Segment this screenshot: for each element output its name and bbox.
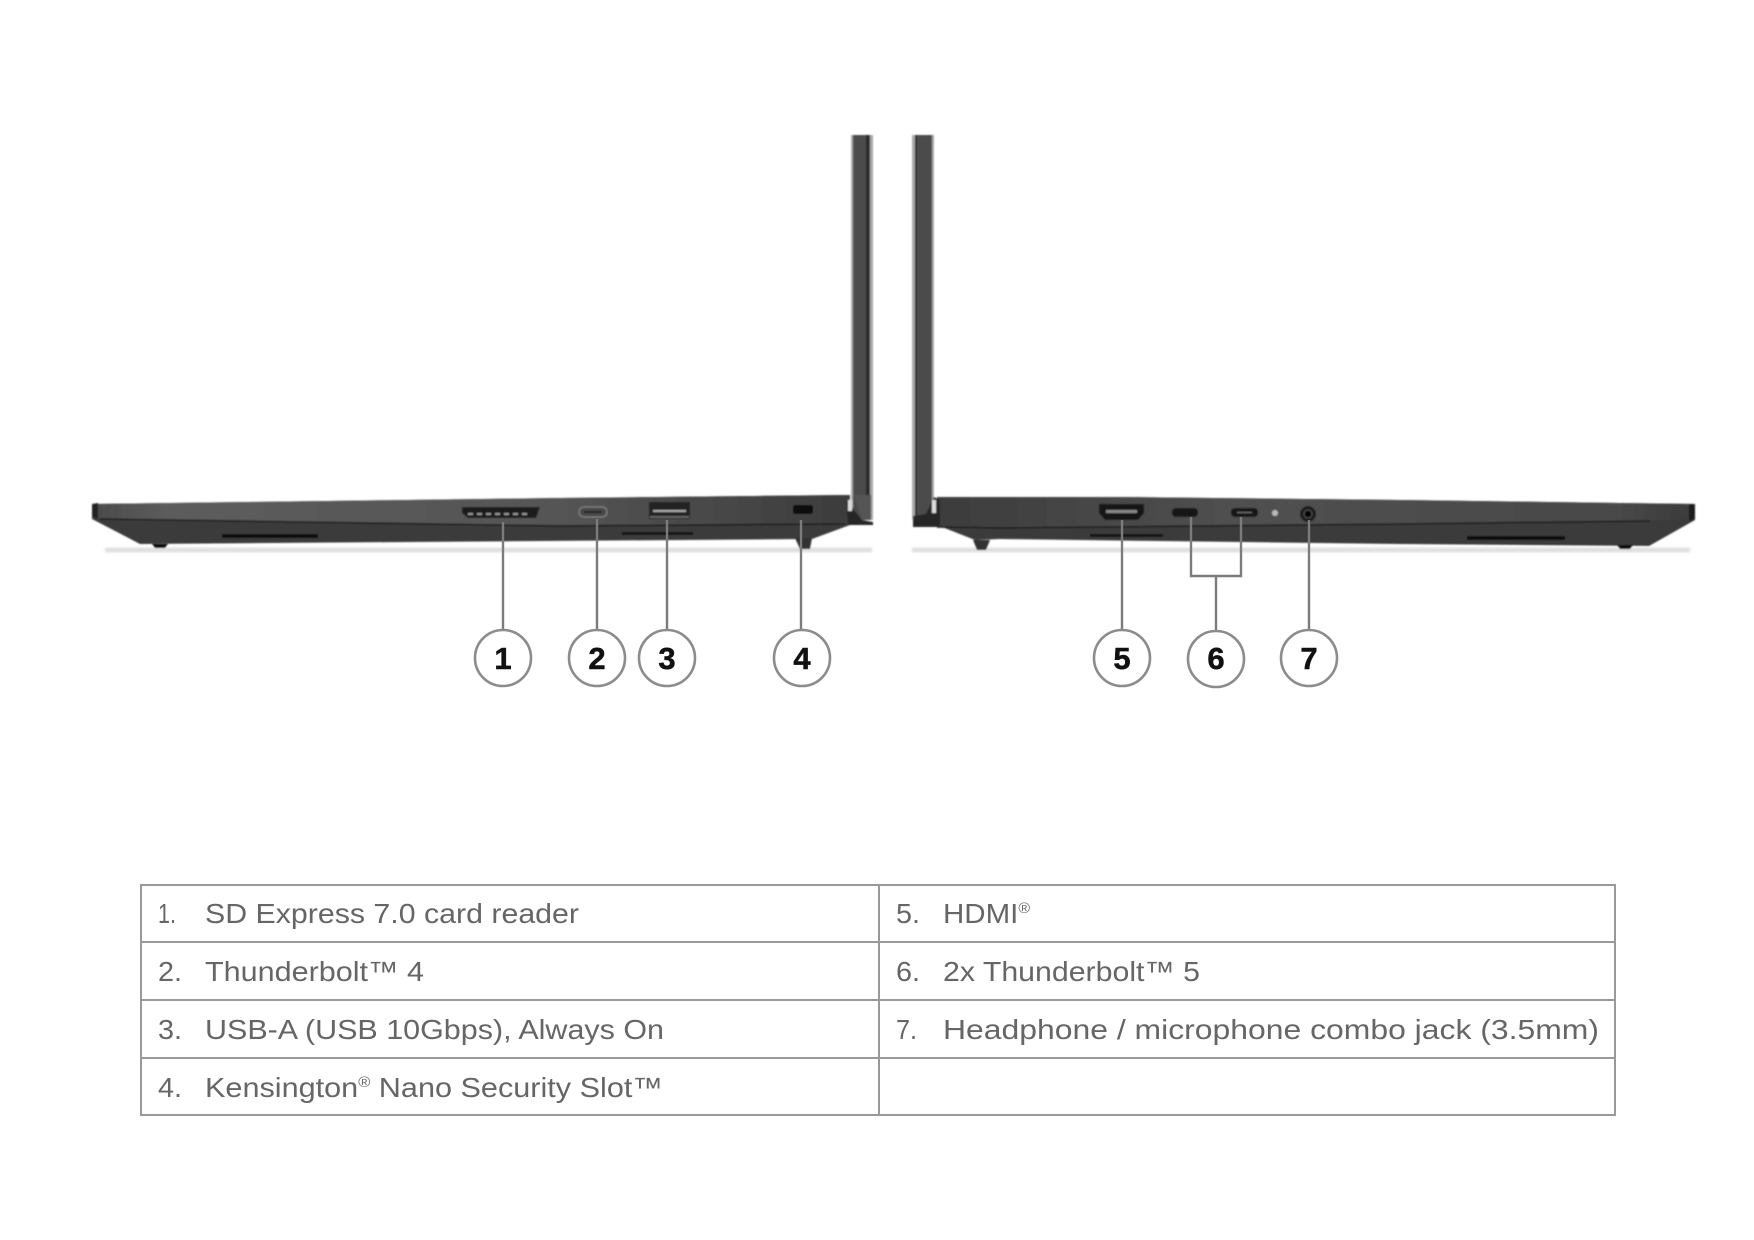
legend item 5: 5. [896,898,920,929]
port: HDMI [1099,504,1144,520]
legend item 5 [896,898,1030,929]
legend item 4: Kensington [205,1072,345,1103]
legend item 6: 2x Thunderbolt™ 5 [943,956,1200,987]
port: Thunderbolt 4 [579,507,607,517]
callout 4 [774,520,830,686]
port: Thunderbolt 5 pair [1172,508,1258,517]
legend item 3: USB-A (USB 10Gbps), Always On [205,1014,664,1045]
left laptop base [92,495,873,549]
port legend table [141,885,1615,1115]
legend item 1: 1. [158,898,176,929]
callout 1: 1 [494,641,512,676]
port: SD card reader [462,507,540,518]
port: Kensington slot [793,505,813,514]
legend item 4: Nano Security Slot™ [370,1072,663,1103]
callout 3 [639,520,695,686]
callout 3: 3 [658,641,676,676]
legend item 5: HDMI [943,898,1015,929]
right laptop screen [912,135,934,520]
callout 1 [475,522,531,686]
legend item 1: SD Express 7.0 card reader [205,898,579,929]
port: USB-A [649,502,690,519]
left laptop side view [92,135,873,552]
left laptop screen [851,135,873,520]
legend item 2: 2. [158,956,182,987]
callout 7: 7 [1300,641,1318,676]
legend item 6: 6. [896,956,920,987]
port: headphone jack [1300,506,1316,522]
legend item 3: 3. [158,1014,182,1045]
callout 6 with bracket: 6 [1207,641,1225,676]
callout 4: 4 [793,641,811,676]
callout 2: 2 [588,641,606,676]
callout 6 with bracket [1188,517,1244,687]
legend item 7: 7. [896,1014,917,1045]
legend item 2: Thunderbolt™ 4 [205,956,424,987]
callout 5: 5 [1113,641,1131,676]
callout 7 [1281,520,1337,686]
callout 5 [1094,520,1150,686]
legend item 7: Headphone / microphone combo jack (3.5mm) [943,1014,1599,1045]
legend item 4 [158,1072,663,1103]
LED indicator [1272,510,1278,516]
legend item 4: 4. [158,1072,182,1103]
callout 2 [569,519,625,686]
legend item 5: ® [1018,900,1030,917]
right laptop base [913,497,1695,550]
right laptop side view [912,135,1695,552]
legend item 4: ® [358,1074,370,1091]
